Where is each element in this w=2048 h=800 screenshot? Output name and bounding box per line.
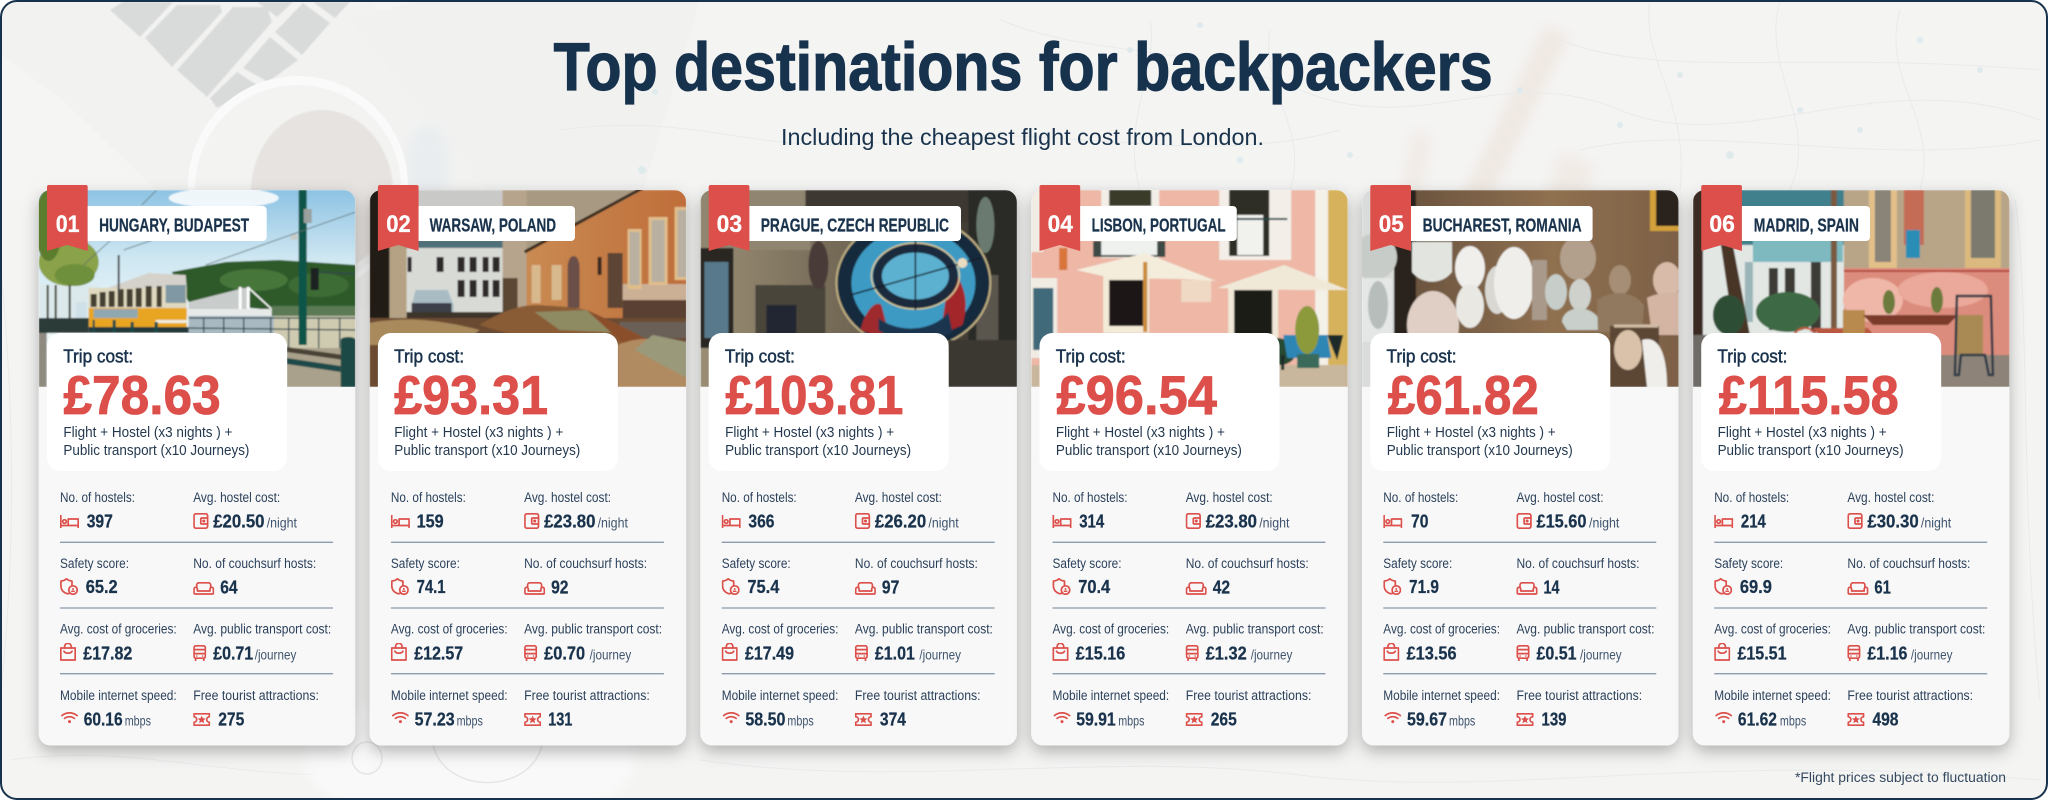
stat: internet: mbps <box>1118 713 1144 729</box>
ribbon: rank 04 <box>1040 185 1080 251</box>
stat: transport: /journey <box>1580 646 1622 662</box>
stat: internet: Mobile internet speed: <box>1383 688 1500 703</box>
trip cost panel <box>709 333 949 471</box>
stat: couchsurf: No. of couchsurf hosts: <box>1516 556 1640 571</box>
photo: Lisbon pink street cafe <box>1031 190 1348 387</box>
ribbon: rank 06 <box>1701 185 1742 251</box>
card 4: Lisbon, Portugal <box>1031 185 1348 746</box>
trip cost panel: £96.54 <box>1056 364 1217 426</box>
stat: hostels: 397 <box>87 512 113 532</box>
stat: hostel cost <box>524 490 628 532</box>
trip cost panel: Flight + Hostel (x3 nights ) + <box>1718 425 1887 441</box>
destination label <box>1080 206 1237 241</box>
photo: Warsaw street with leaves <box>370 188 687 387</box>
stat: transport: £0.51 <box>1536 643 1576 663</box>
stat: couchsurf: 61 <box>1874 577 1891 597</box>
stat: safety: 75.4 <box>747 577 779 597</box>
stat: hostels: 159 <box>417 512 444 532</box>
trip cost panel: Trip cost: <box>725 347 795 367</box>
stat: internet: Mobile internet speed: <box>722 688 838 703</box>
stat: hostels: No. of hostels: <box>391 490 466 505</box>
stat: hostel cost: /night <box>928 515 959 531</box>
stat: internet: 61.62 <box>1738 710 1777 730</box>
stat: hostels: 70 <box>1411 512 1428 532</box>
ribbon: rank 05 <box>1370 185 1411 251</box>
stat: hostel cost: £23.80 <box>544 512 595 532</box>
trip cost panel <box>1370 333 1610 471</box>
ribbon: rank 03 <box>709 185 749 251</box>
stat: attractions <box>1847 688 1973 730</box>
stat: attractions: Free tourist attractions: <box>1516 688 1642 703</box>
stat: internet: 58.50 <box>745 710 785 730</box>
stat: attractions: 275 <box>218 710 244 730</box>
stat: transport: £1.01 <box>875 643 915 663</box>
destination label: WARSAW, POLAND <box>430 216 556 236</box>
stat: groceries <box>1383 622 1500 663</box>
stat: hostel cost: £26.20 <box>875 512 926 532</box>
stat: internet <box>722 688 838 730</box>
ribbon: rank 06: 06 <box>1709 211 1735 238</box>
trip cost panel: Trip cost: <box>1056 347 1126 367</box>
destination label <box>419 206 575 241</box>
stat: groceries: Avg. cost of groceries: <box>1052 622 1169 637</box>
stat: couchsurf <box>524 556 647 597</box>
stat: hostels: No. of hostels: <box>1052 490 1127 505</box>
stat: internet: mbps <box>787 713 814 729</box>
stat: couchsurf: 92 <box>551 577 568 597</box>
trip cost panel <box>47 333 287 471</box>
stat: groceries <box>1714 622 1831 663</box>
trip cost panel <box>1040 333 1280 471</box>
stat: groceries: Avg. cost of groceries: <box>391 622 508 637</box>
trip cost panel: £103.81 <box>725 364 903 426</box>
stat: hostel cost: /night <box>1259 515 1290 531</box>
stat: transport: /journey <box>255 646 296 662</box>
stat: transport: /journey <box>1251 646 1292 662</box>
destination label: LISBON, PORTUGAL <box>1092 216 1226 236</box>
stat: groceries <box>60 622 177 663</box>
stat: internet <box>1052 688 1169 730</box>
destination label <box>1742 206 1870 241</box>
stat: internet <box>60 688 177 730</box>
destination label <box>1411 206 1593 241</box>
stat: hostel cost: /night <box>267 515 297 531</box>
stat: transport: Avg. public transport cost: <box>1847 622 1985 637</box>
stat: safety: Safety score: <box>391 556 460 571</box>
photo: Budapest tram <box>35 188 356 387</box>
stat: safety: 71.9 <box>1409 577 1439 597</box>
trip cost panel: £115.58 <box>1719 364 1899 426</box>
stat: hostels <box>722 490 797 532</box>
stat: attractions <box>1516 688 1642 730</box>
trip cost panel: Flight + Hostel (x3 nights ) + <box>725 425 894 441</box>
trip cost panel <box>378 333 618 471</box>
stat: attractions <box>193 688 319 730</box>
stat: hostel cost: £30.30 <box>1867 512 1919 532</box>
stat: internet: mbps <box>125 713 151 729</box>
stat: transport: Avg. public transport cost: <box>193 622 331 637</box>
stat: internet: mbps <box>1449 713 1475 729</box>
stat: couchsurf: No. of couchsurf hosts: <box>855 556 978 571</box>
stat: attractions: 139 <box>1542 710 1566 730</box>
stat: attractions <box>524 688 650 730</box>
destination label: BUCHAREST, ROMANIA <box>1423 216 1582 236</box>
stat: hostel cost: /night <box>598 515 628 531</box>
destination label <box>88 206 267 241</box>
stat: safety <box>1383 556 1452 597</box>
stat: attractions: 265 <box>1211 710 1237 730</box>
stat: groceries <box>1052 622 1169 663</box>
stat: hostels: No. of hostels: <box>722 490 797 505</box>
stat: groceries: £17.82 <box>83 643 132 663</box>
stat: safety: Safety score: <box>1052 556 1121 571</box>
stat: couchsurf <box>1847 556 1970 597</box>
stat: hostel cost: Avg. hostel cost: <box>1847 490 1934 505</box>
stat: attractions <box>1186 688 1311 730</box>
title: Top destinations for backpackers <box>554 29 1493 105</box>
stat: internet <box>1383 688 1500 730</box>
stat: internet <box>391 688 508 730</box>
stat: safety: Safety score: <box>1714 556 1783 571</box>
stat: couchsurf: No. of couchsurf hosts: <box>1847 556 1970 571</box>
stat: hostels: 214 <box>1741 512 1766 532</box>
stat: safety <box>1052 556 1122 597</box>
stat: safety <box>722 556 791 597</box>
stat: hostel cost <box>193 490 297 532</box>
stat: hostel cost: £20.50 <box>213 512 265 532</box>
stat: groceries <box>391 622 508 663</box>
stat: internet: Mobile internet speed: <box>1052 688 1169 703</box>
stat: couchsurf <box>1516 556 1640 597</box>
stat: transport: £1.32 <box>1206 643 1247 663</box>
stat: internet: 57.23 <box>415 710 455 730</box>
card 5: Bucharest, Romania <box>1351 185 1681 746</box>
stat: hostel cost: Avg. hostel cost: <box>1516 490 1604 505</box>
stat: transport: /journey <box>919 646 961 662</box>
stat: attractions <box>855 688 981 730</box>
stat: hostel cost: Avg. hostel cost: <box>855 490 942 505</box>
stat: transport <box>193 622 331 663</box>
ribbon: rank 04: 04 <box>1048 211 1073 238</box>
stat: transport: £0.71 <box>213 643 253 663</box>
trip cost panel <box>1701 333 1941 471</box>
stat: transport: £0.70 <box>544 643 585 663</box>
trip cost panel: Flight + Hostel (x3 nights ) + <box>1056 425 1225 441</box>
trip cost panel: Flight + Hostel (x3 nights ) + <box>63 425 232 441</box>
stat: couchsurf: 97 <box>882 577 899 597</box>
stat: internet: mbps <box>457 713 483 729</box>
ribbon: rank 02: 02 <box>386 211 411 238</box>
stat: hostels: No. of hostels: <box>1714 490 1789 505</box>
stat: couchsurf <box>855 556 978 597</box>
stat: hostels <box>1714 490 1789 532</box>
stat: attractions: Free tourist attractions: <box>855 688 981 703</box>
stat: hostels: No. of hostels: <box>60 490 135 505</box>
card 3: Prague, Czech Republic <box>700 185 1017 746</box>
stat: couchsurf: No. of couchsurf hosts: <box>524 556 647 571</box>
stat: internet: Mobile internet speed: <box>391 688 508 703</box>
destination label <box>749 206 961 241</box>
stat: attractions: Free tourist attractions: <box>524 688 650 703</box>
stat: hostels <box>60 490 135 532</box>
photo: Bucharest plaster busts <box>1351 190 1681 387</box>
stat: internet: Mobile internet speed: <box>1714 688 1831 703</box>
stat: attractions: Free tourist attractions: <box>193 688 319 703</box>
stat: hostel cost: /night <box>1921 515 1951 531</box>
stat: transport: Avg. public transport cost: <box>524 622 662 637</box>
ribbon: rank 05: 05 <box>1379 211 1404 238</box>
stat: hostels <box>1383 490 1458 532</box>
stat: internet: 60.16 <box>84 710 123 730</box>
stat: transport: /journey <box>1911 646 1953 662</box>
ribbon: rank 03: 03 <box>717 211 742 238</box>
stat: safety: Safety score: <box>1383 556 1452 571</box>
trip cost panel: £61.82 <box>1388 364 1539 426</box>
stat: groceries: Avg. cost of groceries: <box>1714 622 1831 637</box>
stat: transport <box>1516 622 1654 663</box>
stat: internet: mbps <box>1780 713 1806 729</box>
stat: transport <box>1847 622 1985 663</box>
stat: hostels: No. of hostels: <box>1383 490 1458 505</box>
trip cost panel: Public transport (x10 Journeys) <box>1718 443 1904 459</box>
stat: hostel cost <box>855 490 959 532</box>
card 6: Madrid, Spain <box>1693 185 2010 746</box>
stat: safety: 70.4 <box>1078 577 1110 597</box>
stat: transport <box>855 622 993 663</box>
trip cost panel: Public transport (x10 Journeys) <box>1056 443 1242 459</box>
stat: hostels <box>391 490 466 532</box>
stat: hostels: 314 <box>1079 512 1104 532</box>
trip cost panel: Trip cost: <box>1386 347 1456 367</box>
trip cost panel: Flight + Hostel (x3 nights ) + <box>1387 425 1556 441</box>
stat: attractions: 374 <box>880 710 906 730</box>
trip cost panel: Trip cost: <box>1717 347 1787 367</box>
stat: hostels: 366 <box>748 512 775 532</box>
stat: transport <box>524 622 662 663</box>
stat: safety <box>391 556 460 597</box>
stat: couchsurf: No. of couchsurf hosts: <box>193 556 316 571</box>
stat: groceries: £17.49 <box>745 643 794 663</box>
card 2: Warsaw, Poland <box>370 185 687 746</box>
trip cost panel: Flight + Hostel (x3 nights ) + <box>394 425 563 441</box>
stat: hostel cost: /night <box>1589 515 1619 531</box>
stat: hostel cost <box>1516 490 1619 532</box>
stat: hostel cost: Avg. hostel cost: <box>193 490 280 505</box>
stat: safety: 65.2 <box>86 577 118 597</box>
stat: hostel cost: Avg. hostel cost: <box>524 490 611 505</box>
stat: couchsurf: No. of couchsurf hosts: <box>1186 556 1309 571</box>
stat: hostel cost: £15.60 <box>1536 512 1586 532</box>
destination label: PRAGUE, CZECH REPUBLIC <box>761 216 949 236</box>
stat: attractions: 498 <box>1872 710 1899 730</box>
stat: internet: 59.67 <box>1407 710 1447 730</box>
ribbon: rank 02 <box>378 185 419 251</box>
stat: safety: 69.9 <box>1740 577 1772 597</box>
stat: groceries: £12.57 <box>414 643 463 663</box>
stat: safety: 74.1 <box>417 577 446 597</box>
photo: Madrid street terrace <box>1693 190 2010 387</box>
photo: Prague astronomical clock <box>700 190 1017 387</box>
stat: attractions: Free tourist attractions: <box>1847 688 1973 703</box>
stat: couchsurf: 64 <box>220 577 238 597</box>
stat: hostel cost <box>1186 490 1290 532</box>
stat: groceries: £13.56 <box>1407 643 1457 663</box>
stat: attractions: Free tourist attractions: <box>1186 688 1311 703</box>
subtitle: Including the cheapest flight cost from London. <box>781 124 1264 150</box>
stat: internet <box>1714 688 1831 730</box>
stat: transport <box>1186 622 1324 663</box>
stat: groceries: Avg. cost of groceries: <box>1383 622 1500 637</box>
stat: safety: Safety score: <box>722 556 791 571</box>
destination label: HUNGARY, BUDAPEST <box>99 216 249 236</box>
trip cost panel: Public transport (x10 Journeys) <box>394 443 580 459</box>
stat: safety: Safety score: <box>60 556 129 571</box>
stat: attractions: 131 <box>548 710 572 730</box>
stat: transport: Avg. public transport cost: <box>1186 622 1324 637</box>
stat: safety <box>1714 556 1783 597</box>
footnote: *Flight prices subject to fluctuation <box>1795 770 2006 785</box>
stat: internet: 59.91 <box>1076 710 1116 730</box>
trip cost panel: Public transport (x10 Journeys) <box>725 443 911 459</box>
stat: groceries: £15.51 <box>1738 643 1787 663</box>
trip cost panel: £78.63 <box>63 364 221 426</box>
stat: transport: £1.16 <box>1867 643 1907 663</box>
stat: internet: Mobile internet speed: <box>60 688 177 703</box>
stat: groceries: £15.16 <box>1076 643 1125 663</box>
stat: couchsurf <box>193 556 316 597</box>
stat: hostel cost: £23.80 <box>1206 512 1257 532</box>
stat: hostel cost <box>1847 490 1951 532</box>
stat: couchsurf: 14 <box>1544 577 1560 597</box>
destination label: MADRID, SPAIN <box>1754 216 1859 236</box>
stat: couchsurf <box>1186 556 1309 597</box>
stat: hostel cost: Avg. hostel cost: <box>1186 490 1273 505</box>
trip cost panel: Public transport (x10 Journeys) <box>63 443 249 459</box>
ribbon: rank 01 <box>47 185 88 251</box>
stat: transport: Avg. public transport cost: <box>1516 622 1654 637</box>
trip cost panel: Public transport (x10 Journeys) <box>1387 443 1573 459</box>
card 1: Hungary, Budapest <box>35 185 356 746</box>
stat: hostels <box>1052 490 1128 532</box>
trip cost panel: £93.31 <box>394 364 548 426</box>
trip cost panel: Trip cost: <box>394 347 464 367</box>
stat: transport: /journey <box>590 646 631 662</box>
stat: groceries: Avg. cost of groceries: <box>60 622 177 637</box>
stat: groceries: Avg. cost of groceries: <box>722 622 838 637</box>
stat: couchsurf: 42 <box>1213 577 1230 597</box>
stat: safety <box>60 556 129 597</box>
trip cost panel: Trip cost: <box>63 347 133 367</box>
stat: transport: Avg. public transport cost: <box>855 622 993 637</box>
ribbon: rank 01: 01 <box>56 211 80 238</box>
stat: groceries <box>722 622 838 663</box>
